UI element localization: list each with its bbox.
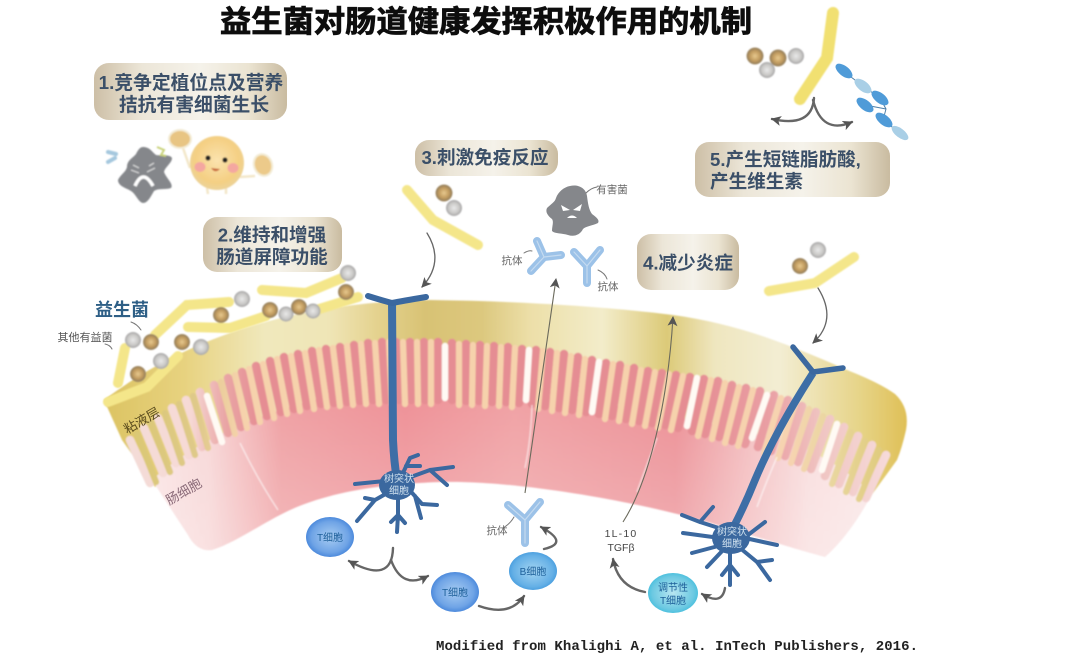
dendritic cell 2: 树突状 bbox=[717, 525, 747, 538]
label: probiotics: 益生菌 bbox=[95, 300, 149, 320]
antibody lower bbox=[486, 502, 540, 543]
short chain fatty acid chains bbox=[833, 61, 911, 143]
arrow into dendritic cell 2 bbox=[813, 288, 827, 343]
T cell 2: T细胞 bbox=[442, 586, 468, 599]
box 4: inflammation: 4.减少炎症 bbox=[643, 252, 733, 274]
label: probiotics bbox=[95, 300, 149, 330]
title: 益生菌对肠道健康发挥积极作用的机制 bbox=[220, 6, 752, 39]
harmful bacterium bbox=[546, 183, 628, 236]
arrows: immune cell network bbox=[349, 527, 725, 610]
box 2: barrier: 肠道屏障功能 bbox=[216, 246, 328, 268]
box 2: barrier: 2.维持和增强 bbox=[218, 224, 327, 246]
box 5: SCFA bbox=[695, 142, 890, 197]
mucus layer bbox=[104, 300, 907, 500]
antibody right: 抗体 bbox=[598, 280, 619, 293]
antibody left bbox=[502, 241, 561, 271]
box 3: immune response bbox=[415, 140, 558, 176]
dendritic cell 1: 树突状 bbox=[384, 472, 414, 485]
T cell 2 bbox=[431, 572, 479, 612]
long arrow: cytokines up bbox=[623, 317, 673, 522]
probiotic producing metabolites bbox=[746, 13, 833, 99]
arrows: metabolite output bbox=[772, 98, 852, 126]
box 4: inflammation bbox=[637, 234, 739, 290]
B cell bbox=[509, 552, 557, 590]
box 5: SCFA: 5.产生短链脂肪酸, bbox=[710, 149, 861, 170]
probiotic rod 3 bbox=[407, 184, 478, 245]
dendritic cell 1 bbox=[355, 296, 453, 532]
label: cytokines: 1L-10 bbox=[605, 528, 637, 540]
box 1: compete bbox=[94, 63, 287, 120]
T cell 1: T细胞 bbox=[317, 531, 343, 544]
antibody right bbox=[574, 250, 619, 293]
dendritic cell 2 bbox=[682, 347, 843, 585]
dendritic cell 2: 细胞 bbox=[722, 537, 742, 550]
sad bacterium bbox=[108, 147, 172, 203]
label: cytokines bbox=[605, 528, 637, 554]
enterocyte layer bbox=[152, 390, 872, 557]
intestinal villi bbox=[130, 342, 886, 499]
gut wall diagram bbox=[104, 300, 907, 557]
dendritic cell 1: 细胞 bbox=[389, 484, 409, 497]
regulatory T cell: 调节性 bbox=[658, 581, 688, 594]
arrow into dendritic cell 1 bbox=[422, 233, 435, 287]
label: other beneficial bacteria bbox=[58, 330, 112, 349]
regulatory T cell: T细胞 bbox=[660, 594, 686, 607]
cell streaks bbox=[240, 405, 777, 510]
T cell 1 bbox=[306, 517, 354, 557]
label: cytokines: TGFβ bbox=[607, 542, 635, 554]
harmful bacterium: 有害菌 bbox=[596, 183, 628, 196]
antibody left: 抗体 bbox=[502, 254, 523, 267]
B cell: B细胞 bbox=[520, 565, 546, 578]
box 1: compete: 拮抗有害细菌生长 bbox=[119, 93, 269, 115]
box 3: immune response: 3.刺激免疫反应 bbox=[421, 147, 549, 168]
citation: Modified from Khalighi A, et al. InTech Publishers, 2016. bbox=[436, 639, 918, 655]
long arrow: antibody up bbox=[525, 279, 556, 493]
label: mucus layer: 粘液层 bbox=[121, 404, 162, 437]
regulatory T cell bbox=[648, 573, 698, 613]
probiotics on mucus bbox=[108, 265, 358, 402]
probiotic rod 4 bbox=[769, 242, 854, 291]
box 2: barrier bbox=[203, 217, 342, 272]
antibody lower: 抗体 bbox=[486, 524, 508, 537]
box 1: compete: 1.竞争定植位点及营养 bbox=[99, 71, 284, 93]
icon: sad harmful bacterium and happy probiotic bbox=[108, 130, 275, 203]
happy probiotic bbox=[169, 130, 275, 194]
label: other beneficial bacteria: 其他有益菌 bbox=[58, 330, 112, 344]
box 5: SCFA: 产生维生素 bbox=[710, 171, 803, 192]
label: enterocytes: 肠细胞 bbox=[163, 475, 204, 508]
